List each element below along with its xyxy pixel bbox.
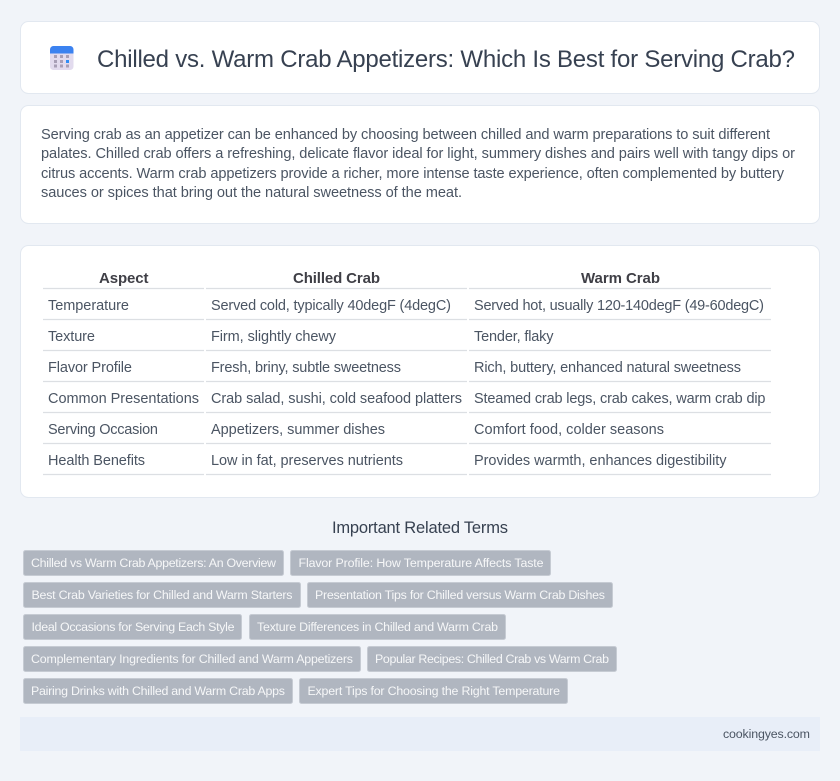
text block: introduction: sauces or spices that bring out the natural sweetness of the meat. (41, 185, 462, 201)
table header (99, 270, 660, 287)
tag (24, 550, 284, 576)
table row: texture: Firm, slightly chewy (211, 329, 337, 345)
table row: health benefits: Health Benefits (48, 453, 145, 469)
table row: texture: Texture (48, 329, 95, 345)
tag: Ideal Occasions for Serving Each Style (32, 620, 235, 634)
table row: texture: Tender, flaky (474, 329, 554, 345)
table row: serving occasion: Serving Occasion (48, 422, 158, 438)
table row: common presentations: Crab salad, sushi, cold seafood platters (211, 391, 462, 407)
text block: introduction (41, 127, 795, 201)
table row: texture (48, 329, 554, 345)
table row: common presentations: Common Presentations (48, 391, 199, 407)
table row: health benefits: Low in fat, preserves nutrients (211, 453, 403, 469)
panel: title header (20, 22, 820, 94)
panel: comparison table (20, 246, 820, 498)
text block: introduction: Serving crab as an appetizer can be enhanced by choosing between chilled and warm preparations to suit different (41, 127, 770, 143)
footer: cookingyes.com (723, 727, 810, 741)
table row: flavor profile: Flavor Profile (48, 360, 132, 376)
table row: serving occasion: Comfort food, colder seasons (474, 422, 664, 438)
text block: introduction: citrus accents. Warm crab appetizers provide a richer, more intense taste experience, often complemented by buttery (41, 166, 785, 182)
heading: important related terms: Important Related Terms (332, 519, 508, 537)
tag: Texture Differences in Chilled and Warm Crab (257, 620, 498, 634)
tag (290, 550, 550, 576)
table header: Chilled Crab (293, 270, 380, 287)
table row: flavor profile: Fresh, briny, subtle sweetness (211, 360, 401, 376)
table row: flavor profile: Rich, buttery, enhanced natural sweetness (474, 360, 741, 376)
title: Chilled vs. Warm Crab Appetizers: Which Is Best for Serving Crab? (97, 46, 795, 73)
table row: temperature: Served hot, usually 120-140degF (49-60degC) (474, 298, 764, 314)
tag: Complementary Ingredients for Chilled and Warm Appetizers (31, 652, 353, 666)
table row: serving occasion: Appetizers, summer dishes (211, 422, 385, 438)
tag: Presentation Tips for Chilled versus Warm Crab Dishes (315, 588, 605, 602)
tag: Flavor Profile: How Temperature Affects Taste (298, 556, 544, 570)
tag: Chilled vs Warm Crab Appetizers: An Overview (31, 556, 276, 570)
tag (300, 678, 568, 704)
footer (20, 717, 820, 751)
table row: temperature: Temperature (48, 298, 129, 314)
tag (308, 582, 612, 608)
tag (250, 614, 506, 640)
table header: Warm Crab (581, 270, 660, 287)
tag (24, 582, 300, 608)
table header: Aspect (99, 270, 148, 287)
table row: temperature (48, 298, 764, 314)
table row: common presentations (48, 391, 766, 407)
tag (24, 614, 242, 640)
table row: health benefits (48, 453, 727, 469)
tag: Best Crab Varieties for Chilled and Warm Starters (32, 588, 292, 602)
tag: Expert Tips for Choosing the Right Temperature (308, 684, 560, 698)
tag: Pairing Drinks with Chilled and Warm Crab Apps (31, 684, 285, 698)
table row: serving occasion (48, 422, 664, 438)
text block: introduction: palates. Chilled crab offers a refreshing, delicate flavor ideal for light, summery dishes and pairs well with tangy dips or (41, 146, 795, 162)
table row: health benefits: Provides warmth, enhances digestibility (474, 453, 727, 469)
table row: flavor profile (48, 360, 741, 376)
icon: calendar (50, 46, 74, 70)
table row: temperature: Served cold, typically 40degF (4degC) (211, 298, 451, 314)
tag list: related terms (24, 550, 616, 704)
tag (24, 646, 360, 672)
tag (24, 678, 292, 704)
tag (368, 646, 616, 672)
panel: introduction (20, 106, 820, 224)
tag: Popular Recipes: Chilled Crab vs Warm Crab (375, 652, 609, 666)
table row: common presentations: Steamed crab legs, crab cakes, warm crab dip (474, 391, 766, 407)
